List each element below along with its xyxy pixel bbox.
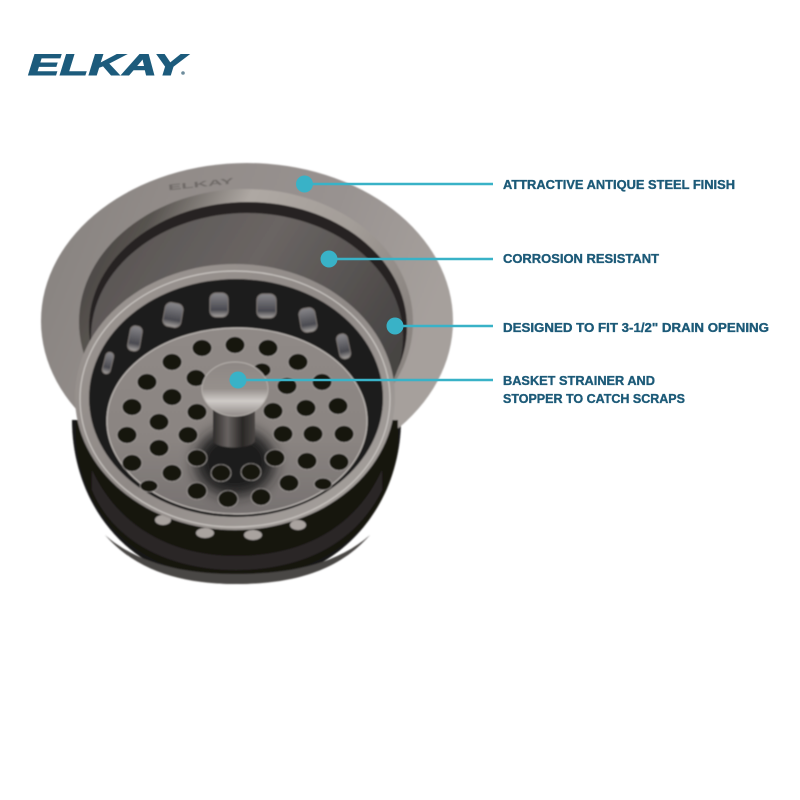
callout: designed to fit drain opening: DESIGNED TO FIT 3-1/2" DRAIN OPENING [503, 321, 769, 335]
callout: corrosion resistant: CORROSION RESISTANT [503, 252, 659, 266]
dark well shadow [89, 202, 407, 452]
stopper knob [202, 362, 268, 416]
logo: Elkay [28, 49, 190, 82]
rim highlight [80, 271, 390, 527]
callout: designed to fit drain opening [386, 318, 769, 335]
flange [41, 163, 453, 479]
stopper stem [213, 405, 255, 448]
callout: attractive antique steel finish: ATTRACTIVE ANTIQUE STEEL FINISH [503, 178, 735, 192]
lower black body [72, 420, 401, 584]
callout: corrosion resistant [320, 250, 659, 268]
callout: basket strainer and stopper [230, 372, 685, 406]
strainer holes [117, 336, 354, 508]
rear rim of flange [79, 189, 413, 455]
strainer plate [107, 328, 367, 514]
callout: basket strainer and stopper: STOPPER TO CATCH SCRAPS [503, 392, 685, 406]
logo: Elkay: ELKAY [28, 49, 190, 82]
stem shadow [195, 428, 275, 496]
lower body front overlay [76, 420, 398, 578]
lower base rim [105, 535, 370, 584]
lower body band [92, 470, 382, 570]
lower basket slots [155, 515, 306, 540]
flange engraved mark: ELKAY [168, 176, 236, 192]
well interior [91, 213, 403, 461]
callout: basket strainer and stopper: BASKET STRAINER AND [503, 374, 655, 388]
basket interior [89, 279, 383, 517]
basket wall slots [101, 293, 352, 375]
callout: attractive antique steel finish [296, 176, 735, 192]
product photo: drain strainer [41, 163, 453, 584]
basket rim [75, 264, 395, 530]
